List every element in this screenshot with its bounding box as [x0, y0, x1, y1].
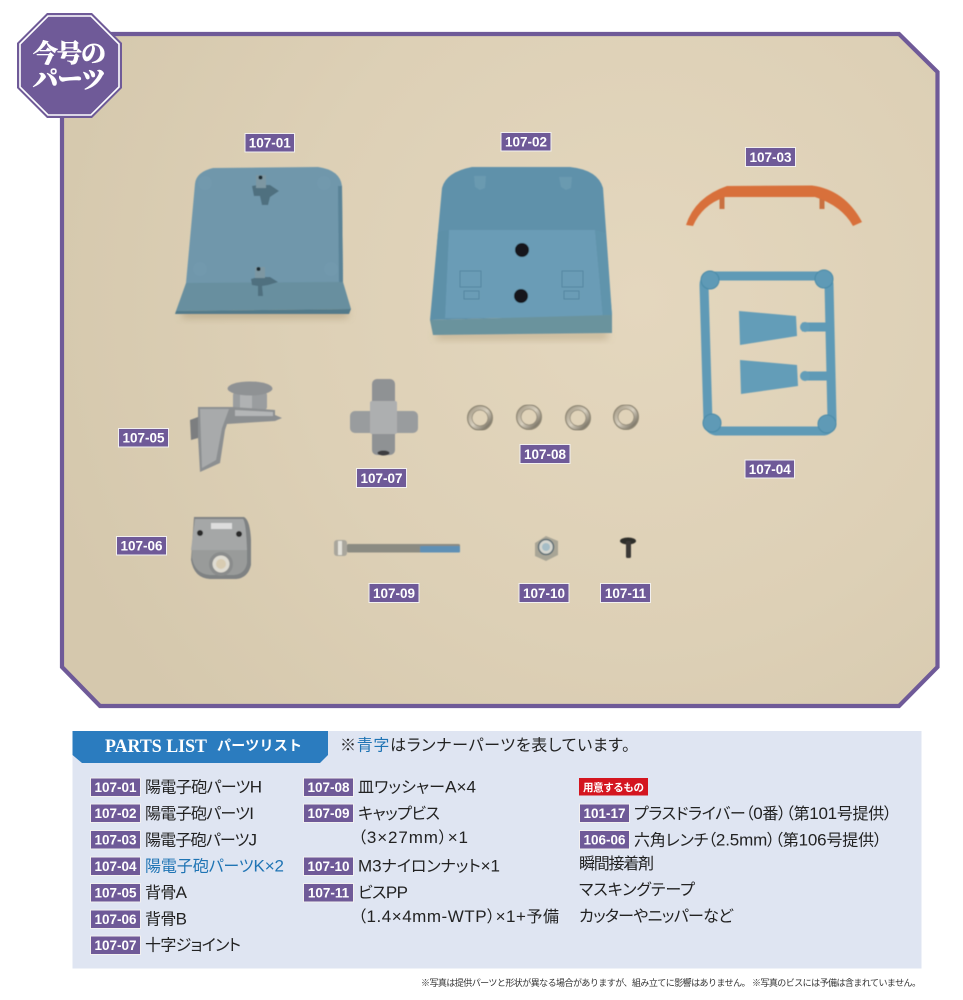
list column 2: 皿ワッシャーA×4: [358, 778, 476, 796]
part 107-03: orange bar: [686, 186, 862, 226]
parts list header tab: PARTS LIST: [105, 736, 207, 757]
label 107-08: [520, 444, 570, 464]
list column 1: 陽電子砲パーツH: [145, 778, 262, 796]
part 107-01: blue plate: [175, 167, 351, 318]
part 107-10: nylon nut: [535, 536, 558, 561]
label 107-09: [369, 584, 419, 602]
list column 1: 107-04: [94, 859, 137, 874]
label 107-11: 107-11: [605, 586, 647, 601]
list column 1: 陽電子砲パーツI: [145, 804, 254, 823]
list column 1: 十字ジョイント: [145, 936, 241, 954]
label 107-07: 107-07: [360, 471, 403, 486]
list column 1: 107-02: [94, 806, 137, 821]
label 107-06: 107-06: [120, 538, 163, 554]
list column 1: 107-01: [94, 780, 137, 795]
list column 3: items to prepare: 101-17: [583, 806, 626, 821]
list column 3: items to prepare: [579, 778, 892, 926]
label 107-02: 107-02: [505, 134, 547, 150]
label 107-01: 107-01: [249, 136, 291, 150]
footnote: ※写真は提供パーツと形状が異なる場合がありますが、組み立てに影響はありません。 ※写真のビスには予備は含まれていません。: [421, 977, 921, 988]
badge: 今号のパーツ: [17, 13, 122, 118]
list column 1: 107-06: [94, 912, 137, 927]
list column 2: （1.4×4mm-WTP）×1+予備: [358, 907, 559, 926]
list column 2: 107-10: [307, 859, 350, 874]
list column 1: 陽電子砲パーツJ: [145, 830, 257, 850]
list column 3: items to prepare: 106-06: [583, 832, 626, 847]
list column 2: [304, 778, 559, 926]
list column 1: 107-05: [94, 885, 137, 900]
list column 2: キャップビス: [358, 805, 440, 823]
part 107-11: small screw: [620, 538, 636, 558]
red tag: 用意するもの: [579, 778, 648, 796]
badge: 今号のパーツ: パーツ: [33, 67, 106, 94]
list column 3: items to prepare: カッターやニッパーなど: [579, 908, 734, 926]
label 107-10: [519, 584, 569, 602]
label 107-09: 107-09: [373, 586, 415, 601]
list column 2: （3×27mm）×1: [358, 828, 468, 847]
badge: 今号のパーツ: 今号の: [33, 40, 106, 68]
red tag: 用意するもの: 用意するもの: [583, 781, 644, 794]
parts list header tab: [72, 731, 328, 763]
list column 3: items to prepare: プラスドライバー（0番）（第101号提供）: [634, 804, 892, 823]
list column 1: 背骨A: [145, 883, 188, 902]
part 107-07: metal cross joint: [350, 379, 418, 456]
list column 2: M3ナイロンナット×1: [358, 856, 500, 876]
label 107-02: [501, 132, 551, 151]
part 107-04: blue runner with two wedges: [701, 270, 836, 433]
label 107-06: [116, 536, 166, 555]
label 107-05: 107-05: [122, 430, 165, 446]
part 107-06: metal back bone B: [191, 517, 251, 579]
label 107-08: 107-08: [524, 447, 567, 462]
label 107-05: [118, 428, 168, 447]
label 107-07: [356, 468, 406, 488]
photo panel with purple frame: [62, 34, 938, 706]
list column 3: items to prepare: 六角レンチ（2.5mm）（第106号提供）: [634, 830, 882, 850]
part 107-02: blue housing: [430, 167, 612, 339]
label 107-04: 107-04: [749, 462, 791, 477]
parts list header tab: パーツリスト: [217, 738, 302, 754]
part 107-05: metal back bone A: [190, 382, 282, 472]
part 107-08: four washers: [470, 407, 636, 428]
list column 2: 107-11: [308, 885, 350, 900]
list column 3: items to prepare: マスキングテープ: [579, 881, 695, 899]
label 107-03: [746, 148, 796, 166]
list column 3: items to prepare: 瞬間接着剤: [579, 855, 654, 873]
list column 2: ビスPP: [358, 883, 408, 902]
label 107-10: 107-10: [523, 586, 565, 601]
label 107-01: [245, 134, 294, 152]
label 107-03: 107-03: [749, 150, 792, 165]
list column 1: 107-07: [94, 938, 137, 953]
label 107-11: [600, 584, 650, 602]
list column 1: 陽電子砲パーツK×2: [145, 856, 284, 876]
list column 2: 107-09: [307, 806, 350, 821]
list column 2: 107-08: [307, 780, 350, 795]
part 107-09: cap screw: [334, 540, 460, 556]
panel: parts list background: [72, 731, 922, 968]
list column 1: [90, 778, 284, 954]
note about blue text: ※青字はランナーパーツを表しています。: [340, 736, 630, 754]
list column 1: 背骨B: [145, 910, 187, 928]
list column 1: 107-03: [94, 832, 137, 847]
